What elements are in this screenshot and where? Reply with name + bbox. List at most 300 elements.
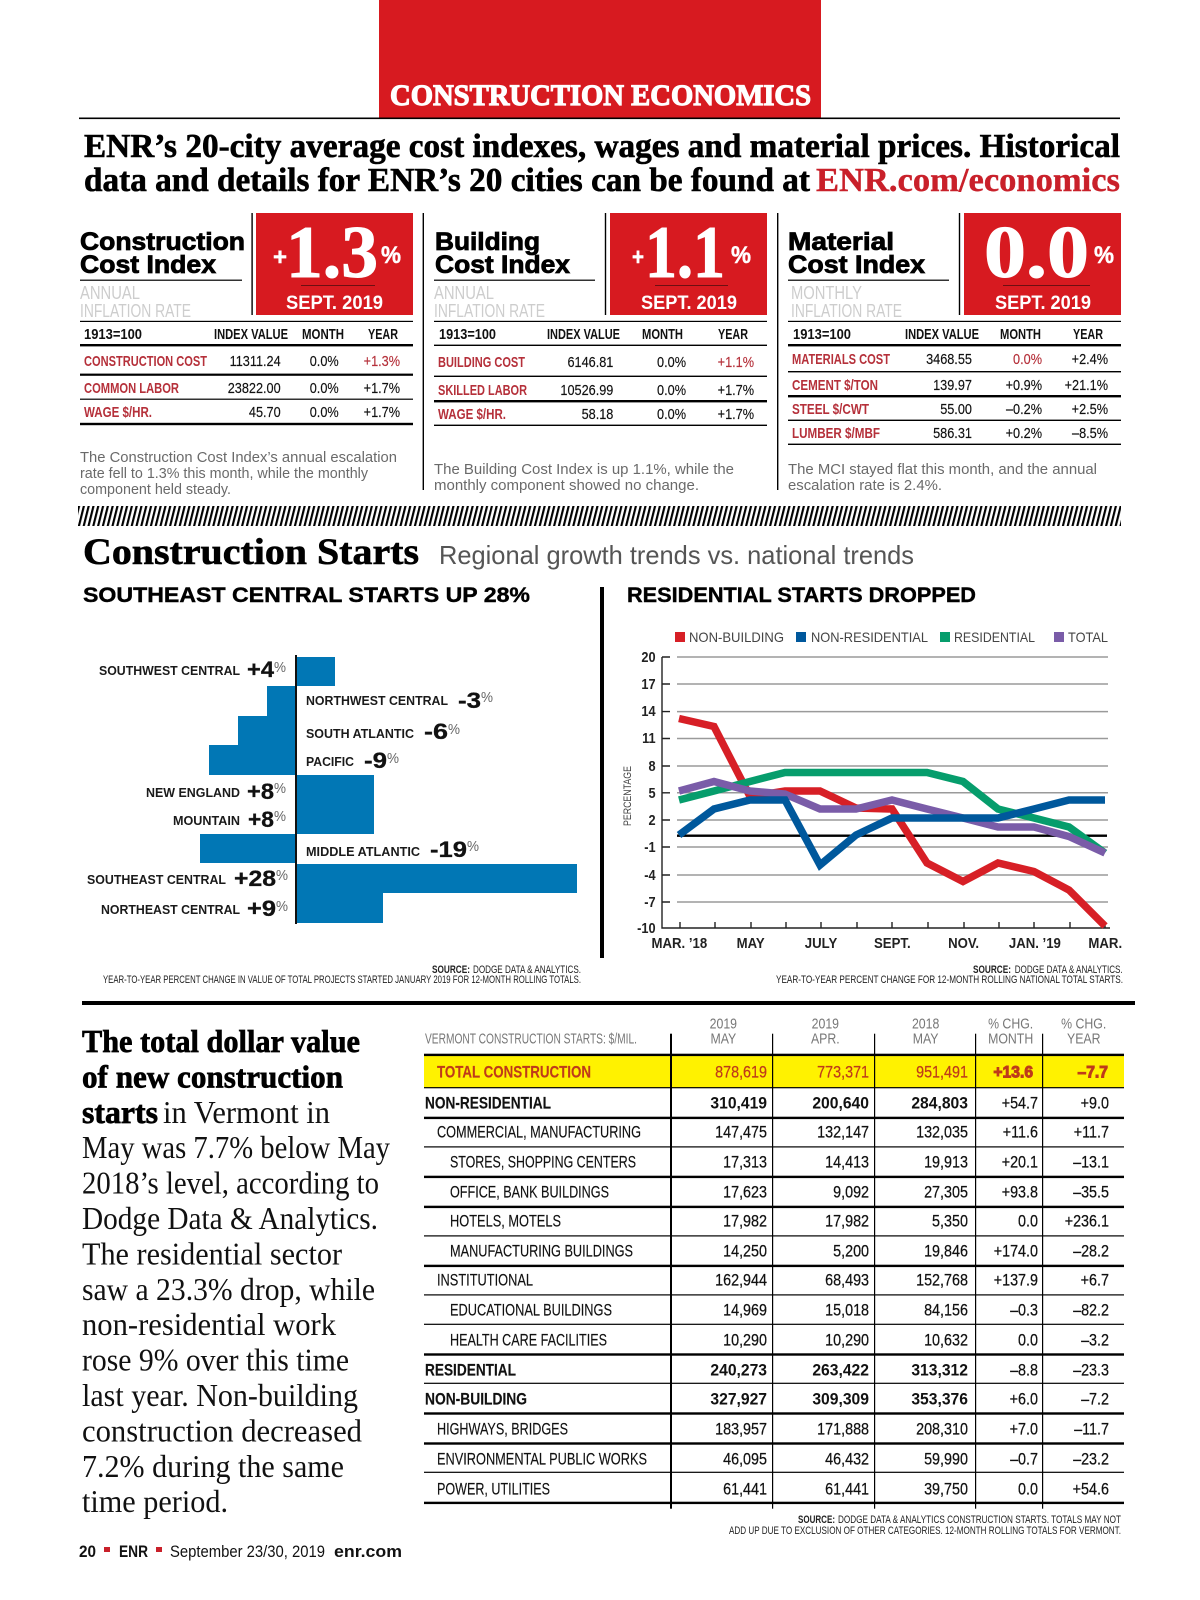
source note: table: SOURCE:	[798, 1514, 835, 1526]
row: non-building: 353,376	[911, 1390, 968, 1409]
table: material cost index: YEAR	[1073, 327, 1103, 343]
row: institutional: +137.9	[994, 1272, 1038, 1290]
source note: line chart: SOURCE:	[973, 964, 1011, 976]
callout: 0.0% sept. 2019: %	[1094, 242, 1114, 269]
row: non-building	[425, 1390, 1109, 1409]
headline: ENR.com/economics	[816, 162, 1120, 199]
callout: 0.0% sept. 2019	[964, 212, 1121, 315]
table header: % CHG.	[988, 1016, 1033, 1032]
source note: bar chart: YEAR-TO-YEAR PERCENT CHANGE IN VALUE OF TOTAL PROJECTS STARTED JANUARY 2019 FOR 12-MONTH ROLLING TOTALS.	[103, 974, 581, 986]
row: highways, bridges: 171,888	[817, 1421, 869, 1439]
table: construction cost index: INDEX VALUE	[214, 327, 288, 343]
table: material cost index: MONTH	[1000, 327, 1041, 343]
row: stores, shopping centers: STORES, SHOPPING CENTERS	[450, 1154, 636, 1172]
chart legend	[675, 629, 1108, 645]
row: non-residential: NON-RESIDENTIAL	[425, 1095, 551, 1113]
row: educational buildings: 15,018	[825, 1302, 869, 1320]
table: building cost index: +1.7%	[718, 406, 754, 422]
row: non-building: 327,927	[710, 1390, 767, 1409]
row: commercial, manufacturing: COMMERCIAL, MANUFACTURING	[437, 1124, 641, 1142]
callout: +1.1% sept. 2019: +	[632, 244, 644, 271]
bar chart: regional starts: NORTHWEST CENTRAL	[306, 694, 448, 708]
panel: building cost index	[434, 212, 767, 494]
series: total	[679, 782, 1105, 853]
text block: vermont summary: of new construction	[82, 1058, 343, 1094]
row: highways, bridges: 183,957	[715, 1421, 767, 1439]
table: material cost index: 0.0%	[1013, 351, 1042, 367]
table: construction cost index: CONSTRUCTION COST	[84, 354, 207, 370]
text block: vermont summary: 2018’s level, according to	[82, 1165, 379, 1201]
table: building cost index: WAGE $/HR.	[438, 407, 506, 423]
table: material cost index: CEMENT $/TON	[792, 378, 878, 394]
row: highways, bridges: HIGHWAYS, BRIDGES	[437, 1421, 568, 1439]
callout: +1.3% sept. 2019: SEPT. 2019	[286, 292, 383, 314]
table: material cost index: –0.2%	[1006, 401, 1042, 417]
heading: material cost index: Cost Index	[788, 251, 925, 279]
heading: building cost index	[434, 228, 595, 281]
row: health care facilities: HEALTH CARE FACILITIES	[450, 1332, 607, 1350]
row: health care facilities: –3.2	[1081, 1332, 1109, 1350]
row: highways, bridges: +7.0	[1010, 1421, 1038, 1439]
row: manufacturing buildings: 19,846	[924, 1243, 968, 1261]
row: highways, bridges	[437, 1421, 1109, 1439]
line chart: national starts: MAR. ’18	[652, 934, 707, 951]
bar chart: regional starts: %	[467, 838, 479, 855]
table: material cost index: –8.5%	[1072, 425, 1108, 441]
row: office, bank buildings: +93.8	[1002, 1184, 1038, 1202]
table header: YEAR	[1067, 1031, 1101, 1047]
row: environmental public works	[437, 1451, 1109, 1469]
callout: +1.1% sept. 2019	[610, 212, 767, 315]
bar chart: regional starts: %	[274, 780, 286, 797]
table: material cost index: 55.00	[940, 401, 972, 417]
heading: construction cost index: Cost Index	[80, 251, 216, 279]
row: power, utilities: POWER, UTILITIES	[437, 1481, 550, 1499]
subheading: annual inflation rate	[434, 283, 545, 321]
source note: line chart	[776, 964, 1123, 986]
row: commercial, manufacturing: 132,035	[916, 1124, 968, 1142]
heading: residential starts dropped: RESIDENTIAL STARTS DROPPED	[627, 583, 976, 607]
row: hotels, motels: HOTELS, MOTELS	[450, 1213, 561, 1231]
row: environmental public works: –0.7	[1010, 1451, 1038, 1469]
text block: vermont summary: last year. Non-building	[82, 1377, 358, 1413]
row: total construction: 951,491	[916, 1064, 968, 1082]
row: environmental public works: –23.2	[1073, 1451, 1109, 1469]
table: building cost index: 0.0%	[657, 382, 686, 398]
subheading: monthly inflation rate	[791, 283, 902, 321]
line chart: national starts: NOV.	[948, 934, 979, 951]
row: environmental public works: 46,095	[723, 1451, 767, 1469]
table: construction cost index: +1.7%	[364, 380, 400, 396]
row: non-residential: 310,419	[710, 1094, 767, 1113]
row: health care facilities: 10,290	[723, 1332, 767, 1350]
table: construction cost index: MONTH	[302, 327, 344, 343]
table header: APR.	[811, 1031, 840, 1047]
table header: VERMONT CONSTRUCTION STARTS: $/MIL.	[425, 1032, 637, 1048]
bar chart: regional starts: +9	[247, 896, 276, 921]
row: non-building: NON-BUILDING	[425, 1391, 527, 1409]
row: educational buildings: EDUCATIONAL BUILDINGS	[450, 1302, 612, 1320]
row: stores, shopping centers: 17,313	[723, 1154, 767, 1172]
row: non-building: +6.0	[1010, 1391, 1038, 1409]
bar chart: regional starts: SOUTH ATLANTIC	[306, 727, 414, 741]
text block: vermont summary	[82, 1023, 390, 1519]
table: vermont construction starts	[424, 1016, 1124, 1509]
row: non-building: –7.2	[1081, 1391, 1109, 1409]
row: office, bank buildings: OFFICE, BANK BUILDINGS	[450, 1184, 609, 1202]
row: power, utilities: 39,750	[924, 1481, 968, 1499]
subheading: annual inflation rate: ANNUAL	[80, 283, 140, 303]
chart legend: NON-BUILDING	[689, 629, 784, 645]
table: material cost index: 1913=100	[793, 327, 851, 343]
row: hotels, motels: 17,982	[723, 1213, 767, 1231]
table: material cost index: 3468.55	[926, 351, 972, 367]
row: stores, shopping centers: 19,913	[924, 1154, 968, 1172]
row: environmental public works: 46,432	[825, 1451, 869, 1469]
line chart: national starts: MAR.	[1088, 934, 1122, 951]
text block: vermont summary: Dodge Data & Analytics.	[82, 1200, 378, 1236]
bar chart: regional starts: MIDDLE ATLANTIC	[306, 845, 420, 859]
text block: vermont summary: rose 9% over this time	[82, 1342, 349, 1378]
table: construction cost index	[80, 321, 413, 425]
row: manufacturing buildings: MANUFACTURING BUILDINGS	[450, 1243, 633, 1261]
text block: vermont summary: in Vermont in	[163, 1094, 330, 1130]
row: hotels, motels	[450, 1213, 1109, 1231]
table: material cost index: STEEL $/CWT	[792, 402, 869, 418]
line chart: national starts: -1	[644, 839, 656, 855]
bar chart: regional starts: %	[387, 750, 399, 767]
line chart: national starts: PERCENTAGE	[622, 766, 634, 826]
table: material cost index: INDEX VALUE	[905, 327, 979, 343]
text block: vermont summary: The residential sector	[82, 1235, 342, 1271]
row: non-residential	[425, 1094, 1109, 1113]
row: residential	[425, 1361, 1109, 1380]
row: educational buildings: 84,156	[924, 1302, 968, 1320]
line chart: national starts: -4	[644, 867, 656, 883]
row: highways, bridges: –11.7	[1074, 1421, 1109, 1439]
table: building cost index: MONTH	[642, 327, 683, 343]
row: commercial, manufacturing	[437, 1124, 1109, 1142]
row: power, utilities: 61,441	[723, 1481, 767, 1499]
row: institutional: INSTITUTIONAL	[437, 1272, 533, 1290]
table header: MONTH	[988, 1031, 1033, 1047]
row: total construction: –7.7	[1078, 1063, 1108, 1082]
line chart: national starts: MAY	[737, 934, 765, 951]
row: residential: 313,312	[911, 1361, 968, 1380]
bar chart: regional starts: +4	[247, 657, 275, 682]
text block: vermont summary: construction decreased	[82, 1412, 362, 1448]
table: building cost index: SKILLED LABOR	[438, 383, 527, 399]
row: commercial, manufacturing: 147,475	[715, 1124, 767, 1142]
panel: material cost index	[788, 212, 1121, 494]
table: construction cost index: COMMON LABOR	[84, 381, 179, 397]
text block: material cost note	[788, 461, 1097, 494]
table: material cost index	[788, 321, 1121, 445]
text block: vermont summary: 7.2% during the same	[82, 1448, 344, 1484]
source note: line chart: DODGE DATA & ANALYTICS.	[1015, 964, 1123, 976]
callout: +1.3% sept. 2019: %	[381, 242, 401, 269]
row: power, utilities: 0.0	[1018, 1481, 1038, 1499]
bar chart: regional starts: -3	[458, 688, 481, 713]
bar chart: regional starts: SOUTHEAST CENTRAL	[87, 873, 226, 887]
row: total construction	[437, 1063, 1108, 1082]
text block: vermont summary: starts	[82, 1094, 158, 1130]
bar chart: regional starts: PACIFIC	[306, 755, 354, 769]
panel: southeast central bar chart	[83, 583, 581, 986]
line chart: national starts: 8	[649, 758, 656, 774]
line chart: national starts: 2	[649, 812, 656, 828]
table header: % CHG.	[1061, 1016, 1106, 1032]
row: total construction: 773,371	[817, 1064, 869, 1082]
table header: MAY	[710, 1031, 736, 1047]
series: non-building	[679, 718, 1105, 926]
callout: +1.1% sept. 2019: 1.1	[645, 212, 725, 294]
table: building cost index: BUILDING COST	[438, 355, 525, 371]
table: building cost index: 1913=100	[439, 327, 496, 343]
table: material cost index: +0.9%	[1006, 377, 1042, 393]
text block: material cost note: The MCI stayed flat this month, and the annual	[788, 461, 1097, 478]
table: material cost index: +2.5%	[1072, 401, 1108, 417]
table: construction cost index: 23822.00	[228, 380, 281, 396]
table: construction cost index: YEAR	[368, 327, 398, 343]
source note: bar chart: DODGE DATA & ANALYTICS.	[473, 964, 581, 976]
row: educational buildings: 14,969	[723, 1302, 767, 1320]
source note: bar chart	[103, 964, 581, 986]
row: health care facilities: 10,632	[924, 1332, 968, 1350]
footer: folio: 20	[79, 1542, 96, 1561]
table header: 2018	[912, 1016, 939, 1032]
subheading: annual inflation rate: ANNUAL	[434, 283, 494, 303]
headline: ENR’s 20-city average cost indexes, wages and material prices. Historical	[84, 128, 1120, 165]
callout: +1.3% sept. 2019	[256, 212, 413, 315]
text block: construction cost note: component held steady.	[80, 481, 231, 498]
table: building cost index: +1.1%	[718, 354, 754, 370]
subheading: annual inflation rate	[80, 283, 191, 321]
table: building cost index: 58.18	[582, 406, 614, 422]
bar chart: regional starts: %	[276, 867, 288, 884]
row: office, bank buildings: 27,305	[924, 1184, 968, 1202]
chart legend: RESIDENTIAL	[954, 629, 1035, 645]
bar chart: regional starts: %	[448, 721, 460, 738]
panel: residential starts line chart	[622, 583, 1123, 986]
footer: folio: enr.com	[334, 1542, 402, 1561]
text block: vermont summary: May was 7.7% below May	[82, 1129, 390, 1165]
row: residential: –8.8	[1010, 1362, 1038, 1380]
table header: MAY	[913, 1031, 939, 1047]
text block: building cost note: monthly component showed no change.	[434, 477, 699, 494]
table: building cost index: INDEX VALUE	[547, 327, 620, 343]
row: total construction: +13.6	[993, 1063, 1033, 1082]
row: non-residential: 284,803	[911, 1094, 968, 1113]
line chart: national starts: JAN. ’19	[1009, 934, 1061, 951]
section heading: construction starts: Regional growth trends vs. national trends	[439, 540, 914, 570]
row: power, utilities	[437, 1481, 1109, 1499]
source note: table	[729, 1514, 1121, 1537]
bar chart: regional starts: NORTHEAST CENTRAL	[101, 903, 240, 917]
bar chart: regional starts: +8	[248, 807, 274, 832]
row: office, bank buildings	[450, 1184, 1109, 1202]
row: residential: 263,422	[812, 1361, 869, 1380]
bar chart: regional starts: -9	[364, 748, 387, 773]
footer: folio	[79, 1542, 402, 1561]
row: manufacturing buildings: 14,250	[723, 1243, 767, 1261]
row: educational buildings: –82.2	[1073, 1302, 1109, 1320]
footer: folio: ENR	[119, 1542, 148, 1561]
callout: +1.3% sept. 2019: 1.3	[286, 212, 378, 294]
row: non-residential: 200,640	[812, 1094, 869, 1113]
series: residential	[679, 772, 1105, 853]
table: material cost index: 586.31	[933, 425, 972, 441]
panel: construction cost index	[80, 212, 413, 498]
row: manufacturing buildings: +174.0	[994, 1243, 1038, 1261]
section banner: construction economics	[79, 0, 1120, 119]
row: institutional	[437, 1272, 1109, 1290]
text block: vermont summary: saw a 23.3% drop, while	[82, 1271, 375, 1307]
heading: southeast central starts up 28%: SOUTHEAST CENTRAL STARTS UP 28%	[83, 583, 530, 607]
row: non-building: 309,309	[812, 1390, 869, 1409]
heading: material cost index: Material	[788, 228, 894, 256]
row: environmental public works: ENVIRONMENTAL PUBLIC WORKS	[437, 1451, 647, 1469]
row: commercial, manufacturing: +11.7	[1074, 1124, 1109, 1142]
row: educational buildings	[450, 1302, 1109, 1320]
callout: 0.0% sept. 2019: 0.0	[984, 212, 1089, 294]
row: residential: RESIDENTIAL	[425, 1362, 516, 1380]
line chart: national starts	[622, 649, 1122, 951]
footer: folio: September 23/30, 2019	[170, 1542, 325, 1561]
table: construction cost index: 0.0%	[310, 353, 339, 369]
table: material cost index: +0.2%	[1006, 425, 1042, 441]
text block: vermont summary: non-residential work	[82, 1306, 336, 1342]
row: manufacturing buildings: 5,200	[833, 1243, 869, 1261]
row: office, bank buildings: 9,092	[833, 1184, 869, 1202]
row: hotels, motels: 0.0	[1018, 1213, 1038, 1231]
table: material cost index: MATERIALS COST	[792, 352, 890, 368]
headline: data and details for ENR’s 20 cities can be found at	[84, 162, 811, 199]
row: health care facilities: 10,290	[825, 1332, 869, 1350]
bar chart: regional starts: %	[276, 898, 288, 915]
series: non-residential	[679, 800, 1105, 865]
callout: +1.1% sept. 2019: %	[731, 242, 751, 269]
text block: construction cost note	[80, 449, 397, 498]
heading: construction cost index	[80, 228, 245, 281]
heading: building cost index: Building	[435, 228, 540, 256]
text block: material cost note: escalation rate is 2.4%.	[788, 477, 942, 494]
bar chart: regional starts: %	[274, 808, 286, 825]
row: stores, shopping centers	[450, 1154, 1109, 1172]
table: building cost index: 10526.99	[560, 382, 613, 398]
table: construction cost index: WAGE $/HR.	[84, 405, 152, 421]
row: commercial, manufacturing: +11.6	[1003, 1124, 1038, 1142]
bar chart: regional starts	[87, 655, 577, 924]
line chart: national starts: JULY	[805, 934, 838, 951]
row: health care facilities: 0.0	[1018, 1332, 1038, 1350]
table: building cost index	[434, 321, 767, 426]
headline	[84, 128, 1120, 199]
table: construction cost index: 0.0%	[310, 380, 339, 396]
bar chart: regional starts: NEW ENGLAND	[146, 786, 240, 800]
row: non-residential: +9.0	[1081, 1095, 1109, 1113]
bar chart: regional starts: %	[274, 659, 286, 676]
table: construction cost index: +1.7%	[364, 404, 400, 420]
source note: bar chart: SOURCE:	[432, 964, 470, 976]
row: total construction: 878,619	[715, 1064, 767, 1082]
chart legend: NON-RESIDENTIAL	[811, 629, 928, 645]
table: construction cost index: 1913=100	[84, 327, 142, 343]
heading: building cost index: Cost Index	[435, 251, 570, 279]
heading: material cost index	[788, 228, 949, 281]
row: hotels, motels: 5,350	[932, 1213, 968, 1231]
callout: +1.1% sept. 2019: SEPT. 2019	[641, 292, 737, 314]
row: power, utilities: +54.6	[1073, 1481, 1109, 1499]
table: construction cost index: +1.3%	[364, 353, 400, 369]
text block: construction cost note: The Construction Cost Index’s annual escalation	[80, 449, 397, 466]
subheading: monthly inflation rate: INFLATION RATE	[791, 301, 902, 321]
bar chart: regional starts: %	[481, 689, 493, 706]
table: material cost index: +2.4%	[1072, 351, 1108, 367]
row: stores, shopping centers: –13.1	[1073, 1154, 1109, 1172]
text block: building cost note	[434, 461, 734, 494]
table: building cost index: YEAR	[718, 327, 748, 343]
row: non-residential: +54.7	[1002, 1095, 1038, 1113]
section heading: construction starts: Construction Starts	[83, 532, 419, 573]
subheading: annual inflation rate: INFLATION RATE	[434, 301, 545, 321]
table: building cost index: 0.0%	[657, 406, 686, 422]
section heading: construction starts	[83, 532, 914, 573]
line chart: national starts: 5	[649, 785, 656, 801]
table: material cost index: 139.97	[933, 377, 972, 393]
bar chart: regional starts: +8	[247, 779, 274, 804]
callout: 0.0% sept. 2019: SEPT. 2019	[995, 292, 1091, 314]
row: stores, shopping centers: +20.1	[1002, 1154, 1038, 1172]
text block: vermont summary: time period.	[82, 1483, 228, 1519]
row: office, bank buildings: 17,623	[723, 1184, 767, 1202]
line chart: national starts: 11	[642, 730, 656, 746]
row: health care facilities	[450, 1332, 1109, 1350]
bar chart: regional starts: +28	[234, 866, 276, 891]
line chart: national starts: -7	[644, 894, 656, 910]
table: building cost index: +1.7%	[718, 382, 754, 398]
table: building cost index: 0.0%	[657, 354, 686, 370]
chart legend: TOTAL	[1068, 629, 1108, 645]
row: hotels, motels: 17,982	[825, 1213, 869, 1231]
subheading: annual inflation rate: INFLATION RATE	[80, 301, 191, 321]
row: institutional: 68,493	[825, 1272, 869, 1290]
line chart: national starts: 20	[641, 649, 656, 665]
section banner: construction economics: CONSTRUCTION ECONOMICS	[390, 79, 811, 112]
row: highways, bridges: 208,310	[916, 1421, 968, 1439]
table: construction cost index: 45.70	[249, 404, 281, 420]
table: material cost index: LUMBER $/MBF	[792, 426, 880, 442]
row: institutional: 162,944	[715, 1272, 767, 1290]
table: construction cost index: 11311.24	[230, 353, 281, 369]
table: building cost index: 6146.81	[567, 354, 613, 370]
bar chart: regional starts: MOUNTAIN	[173, 814, 240, 828]
row: office, bank buildings: –35.5	[1073, 1184, 1109, 1202]
table: material cost index: +21.1%	[1065, 377, 1108, 393]
subheading: monthly inflation rate: MONTHLY	[791, 283, 862, 303]
row: institutional: +6.7	[1081, 1272, 1109, 1290]
row: total construction: TOTAL CONSTRUCTION	[437, 1064, 591, 1082]
row: stores, shopping centers: 14,413	[825, 1154, 869, 1172]
line chart: national starts: 17	[641, 676, 656, 692]
row: residential: –23.3	[1073, 1362, 1109, 1380]
bar chart: regional starts: -6	[424, 719, 448, 744]
bar chart: regional starts: -19	[430, 837, 467, 862]
line chart: national starts: SEPT.	[874, 934, 911, 951]
row: commercial, manufacturing: 132,147	[817, 1124, 869, 1142]
line chart: national starts: -10	[637, 920, 656, 936]
row: power, utilities: 61,441	[825, 1481, 869, 1499]
